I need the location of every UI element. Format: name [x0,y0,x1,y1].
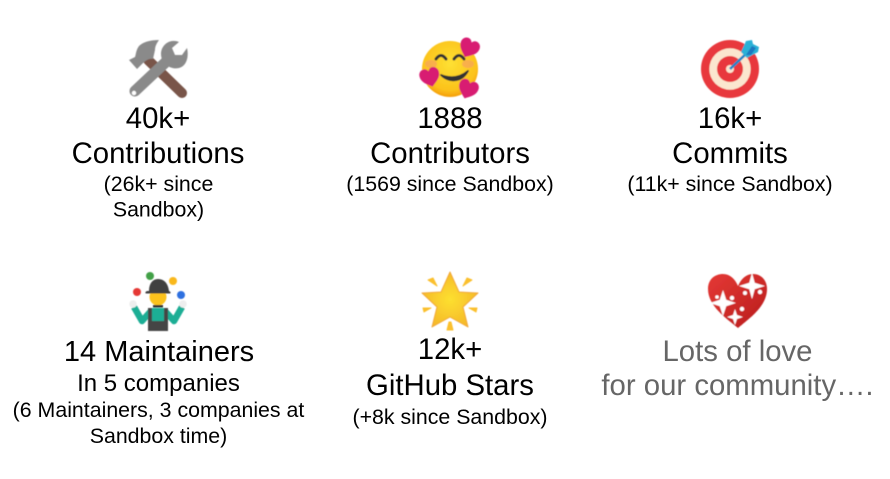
value: 16k+ [698,102,762,135]
note line 2: Sandbox) [113,198,204,222]
icon: person juggling [129,272,187,331]
icon: bullseye with dart [701,40,759,98]
value: 40k+ [126,102,190,135]
panel: contributions [72,40,244,222]
value: 12k+ [418,333,482,366]
label: GitHub Stars [366,369,534,402]
panel: github stars [352,272,548,429]
icon: sparkling heart [708,274,767,328]
panel: contributors [346,36,554,196]
label: Commits [672,137,788,170]
panel: maintainers [13,272,304,448]
message line 1: Lots of love [662,335,812,368]
icon: glowing star [422,272,478,330]
note: (11k+ since Sandbox) [627,172,833,196]
note line 2: Sandbox time) [90,424,227,448]
note: (1569 since Sandbox) [346,172,554,196]
label: Contributions [72,137,244,170]
value and label: 14 Maintainers [64,336,254,368]
label: Contributors [370,137,530,170]
panel: community [601,274,874,402]
message line 2: for our community…. [601,369,874,402]
note: (6 Maintainers, 3 companies at [13,398,304,422]
icon: smiling face with hearts [418,36,482,102]
value: 1888 [417,102,483,135]
note: (+8k since Sandbox) [352,405,548,429]
icon: hammer and wrench [129,40,188,95]
note: (26k+ since [104,172,213,196]
sublabel: In 5 companies [77,370,240,397]
panel: commits [627,40,833,196]
